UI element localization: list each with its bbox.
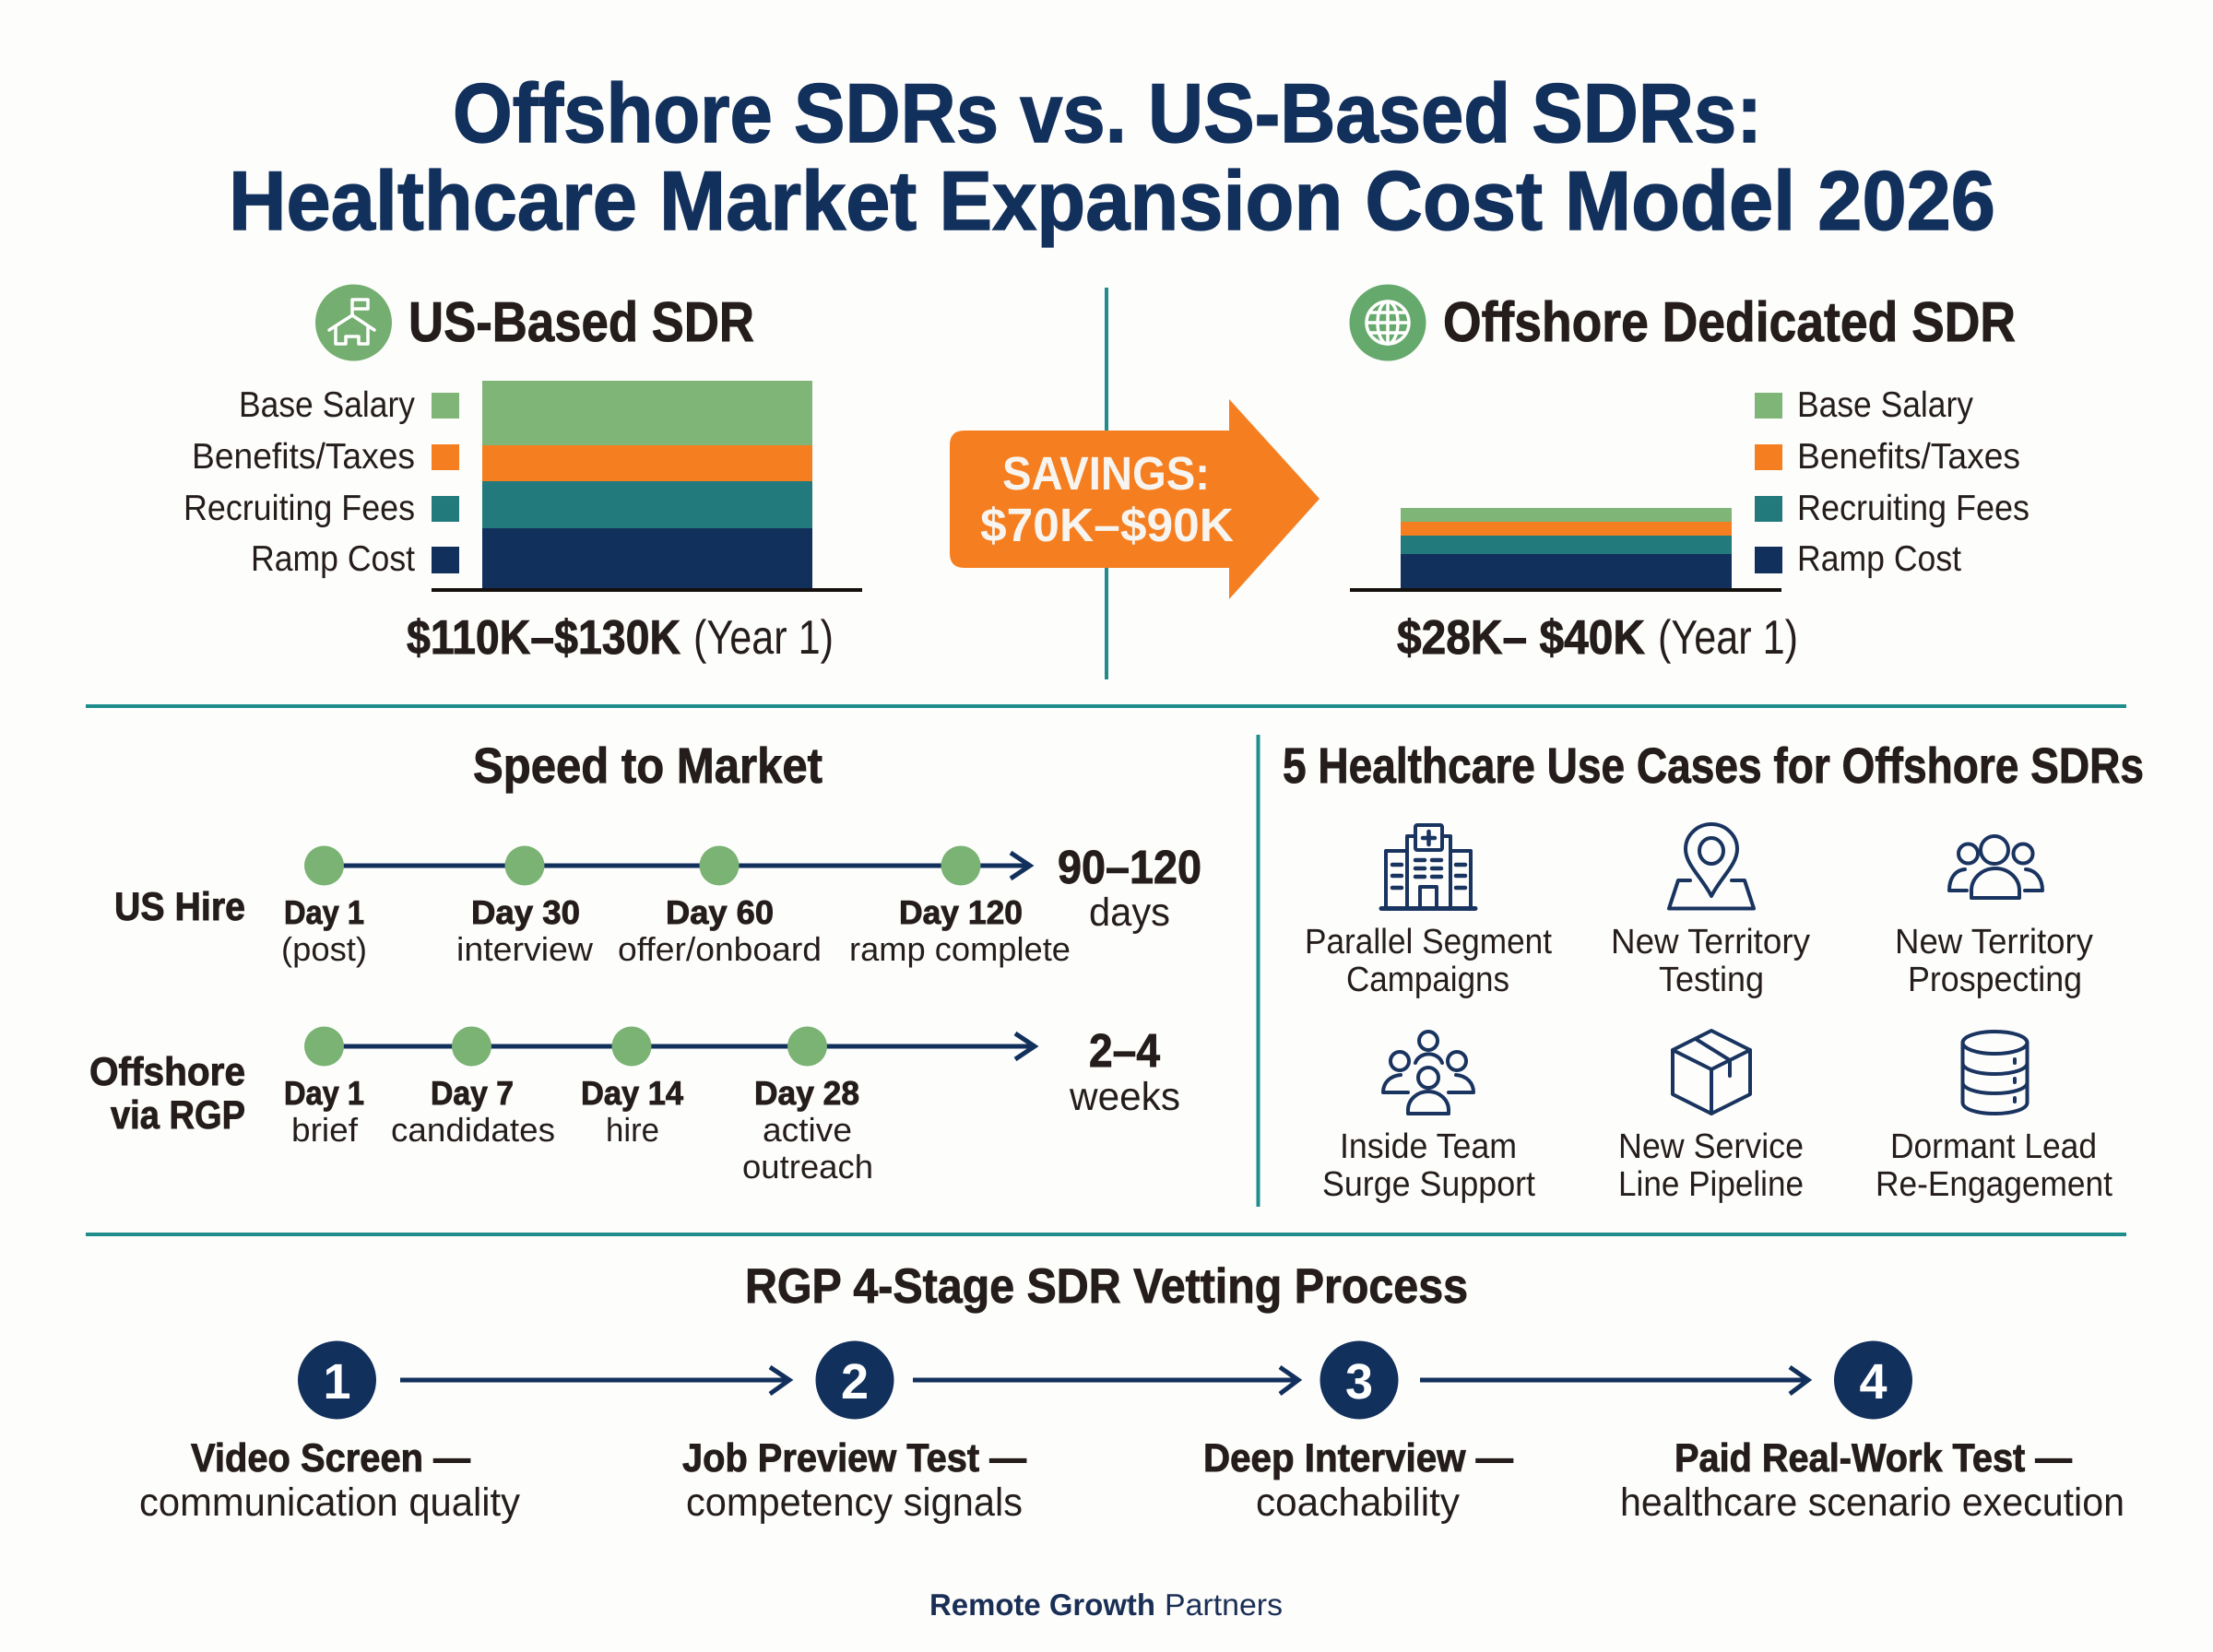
timeline: US hire: Day 1 [284, 893, 364, 931]
US cost total: $110K–$130K [407, 611, 680, 665]
timeline: offshore via RGP: candidates [391, 1111, 555, 1149]
heading: Offshore Dedicated SDR: Offshore Dedicated SDR [1443, 290, 2016, 353]
footer: Remote Growth Partners: Partners [1165, 1587, 1283, 1622]
timeline: US hire: (post) [281, 930, 367, 968]
panel: US-based SDR cost [183, 284, 862, 665]
title: Healthcare Market Expansion Cost Model 2026 [229, 155, 1995, 248]
use case: new territory testing: New Territory [1611, 923, 1810, 962]
timeline: offshore via RGP: Offshore [89, 1050, 245, 1094]
stage 4: paid real-work test: Paid Real-Work Test — [1675, 1436, 2072, 1481]
US cost total: (Year 1) [693, 611, 834, 665]
heading: RGP 4-Stage SDR Vetting Process: RGP 4-Stage SDR Vetting Process [745, 1259, 1468, 1314]
title [229, 67, 1995, 248]
timeline: US hire: Day 30 [471, 893, 580, 931]
timeline: US hire [114, 841, 1201, 968]
icon: team [1383, 1032, 1473, 1114]
legend: offshore cost categories [1755, 385, 2030, 579]
panel: offshore dedicated SDR cost [1350, 284, 2030, 665]
timeline: offshore via RGP: Day 14 [581, 1074, 683, 1112]
arrow: savings callout [950, 399, 1320, 599]
stage 1: video screen: communication quality [139, 1481, 520, 1525]
use case: inside team surge support: Inside Team [1340, 1127, 1517, 1166]
use case: inside team surge support [1322, 1032, 1535, 1204]
timeline: offshore via RGP: 2–4 [1089, 1024, 1161, 1077]
timeline: offshore via RGP: hire [606, 1111, 659, 1149]
use case: new territory prospecting: New Territory [1895, 923, 2093, 962]
arrow: stage 3 to 4 [1420, 1367, 1808, 1394]
stage 1: video screen: Video Screen — [191, 1436, 470, 1481]
timeline: offshore via RGP: brief [291, 1111, 359, 1149]
use case: new territory prospecting: Prospecting [1908, 961, 2082, 999]
use case: inside team surge support: Surge Support [1322, 1165, 1535, 1204]
use case: parallel segment campaigns: Parallel Segment [1305, 923, 1552, 962]
legend: offshore cost categories: Ramp Cost [1797, 539, 1961, 579]
use case: new territory testing: Testing [1659, 961, 1764, 999]
use case: new territory prospecting [1895, 836, 2093, 999]
stage 2: job preview test: competency signals [686, 1481, 1023, 1525]
legend: offshore cost categories: Recruiting Fees [1797, 489, 2030, 528]
timeline: offshore via RGP: Day 28 [754, 1074, 859, 1112]
icon: database [1962, 1032, 2027, 1114]
arrow: savings callout: $70K–$90K [980, 499, 1234, 551]
use case: new service line pipeline: Line Pipeline [1618, 1165, 1804, 1204]
title: Offshore SDRs vs. US-Based SDRs: [453, 67, 1762, 160]
stage 2: job preview test [682, 1340, 1026, 1525]
stage 3: deep interview [1203, 1340, 1513, 1525]
timeline: offshore via RGP: via RGP [111, 1093, 245, 1138]
icon: group of three [1949, 836, 2042, 898]
legend: offshore cost categories: Benefits/Taxes [1797, 437, 2020, 477]
legend: US cost categories: Benefits/Taxes [192, 437, 415, 477]
stage 3: deep interview: Deep Interview — [1203, 1436, 1513, 1481]
timeline: US hire: offer/onboard [618, 930, 822, 968]
stage 2: job preview test: 2 [841, 1354, 869, 1410]
stage 3: deep interview: coachability [1256, 1481, 1460, 1525]
timeline: US hire: Day 60 [666, 893, 774, 931]
timeline: US hire: 90–120 [1058, 841, 1201, 893]
icon: hospital [1381, 825, 1475, 909]
use case: new service line pipeline [1618, 1031, 1804, 1204]
timeline: US hire: days [1089, 891, 1170, 935]
icon: globe [1350, 284, 1426, 361]
legend: US cost categories: Recruiting Fees [183, 489, 415, 528]
timeline: US hire: Day 120 [899, 893, 1023, 931]
timeline: offshore via RGP: active [763, 1111, 852, 1149]
timeline: offshore via RGP: Day 1 [284, 1074, 364, 1112]
stage 4: paid real-work test: healthcare scenario execution [1620, 1481, 2124, 1525]
heading: Speed to Market: Speed to Market [473, 738, 822, 794]
stacked bar: US cost [432, 381, 862, 590]
timeline: offshore via RGP: outreach [742, 1148, 873, 1186]
stage 1: video screen [139, 1340, 520, 1525]
use case: dormant lead re-engagement [1876, 1032, 2112, 1204]
icon: map pin [1669, 824, 1754, 909]
arrow: stage 2 to 3 [913, 1367, 1298, 1394]
offshore cost total: (Year 1) [1658, 611, 1798, 665]
stage 3: deep interview: 3 [1345, 1354, 1373, 1410]
stage 2: job preview test: Job Preview Test — [682, 1436, 1026, 1481]
offshore cost total: $28K– $40K [1397, 611, 1645, 665]
heading: US-Based SDR: US-Based SDR [408, 290, 754, 353]
use case: parallel segment campaigns [1305, 825, 1552, 999]
timeline: US hire: US Hire [114, 885, 245, 929]
timeline: offshore via RGP [89, 1024, 1180, 1186]
legend: offshore cost categories: Base Salary [1797, 385, 1973, 425]
offshore cost total [1397, 611, 1798, 665]
footer: Remote Growth Partners: Remote Growth [929, 1587, 1155, 1622]
footer: Remote Growth Partners [929, 1587, 1283, 1622]
use case: dormant lead re-engagement: Re-Engagement [1876, 1165, 2112, 1204]
use case: parallel segment campaigns: Campaigns [1346, 961, 1509, 999]
panel: speed to market [89, 738, 1201, 1186]
icon: house with flag [315, 284, 392, 361]
panel: RGP vetting process [139, 1259, 2124, 1525]
icon: box [1673, 1031, 1750, 1114]
arrow: stage 1 to 2 [400, 1367, 789, 1394]
legend: US cost categories: Base Salary [239, 385, 415, 425]
stage 4: paid real-work test [1620, 1340, 2124, 1525]
stage 1: video screen: 1 [323, 1354, 351, 1410]
timeline: US hire: ramp complete [849, 930, 1071, 968]
legend: US cost categories: Ramp Cost [251, 539, 415, 579]
use case: new service line pipeline: New Service [1618, 1127, 1804, 1166]
timeline: offshore via RGP: weeks [1069, 1075, 1180, 1119]
arrow: savings callout: SAVINGS: [1002, 447, 1210, 500]
use case: dormant lead re-engagement: Dormant Lead [1890, 1127, 2097, 1166]
legend: US cost categories [183, 385, 459, 579]
panel: healthcare use cases [1283, 738, 2144, 1204]
stage 4: paid real-work test: 4 [1859, 1354, 1888, 1410]
timeline: US hire: interview [456, 930, 594, 968]
stacked bar: offshore cost [1350, 508, 1781, 590]
use case: new territory testing [1611, 824, 1810, 999]
timeline: offshore via RGP: Day 7 [431, 1074, 514, 1112]
